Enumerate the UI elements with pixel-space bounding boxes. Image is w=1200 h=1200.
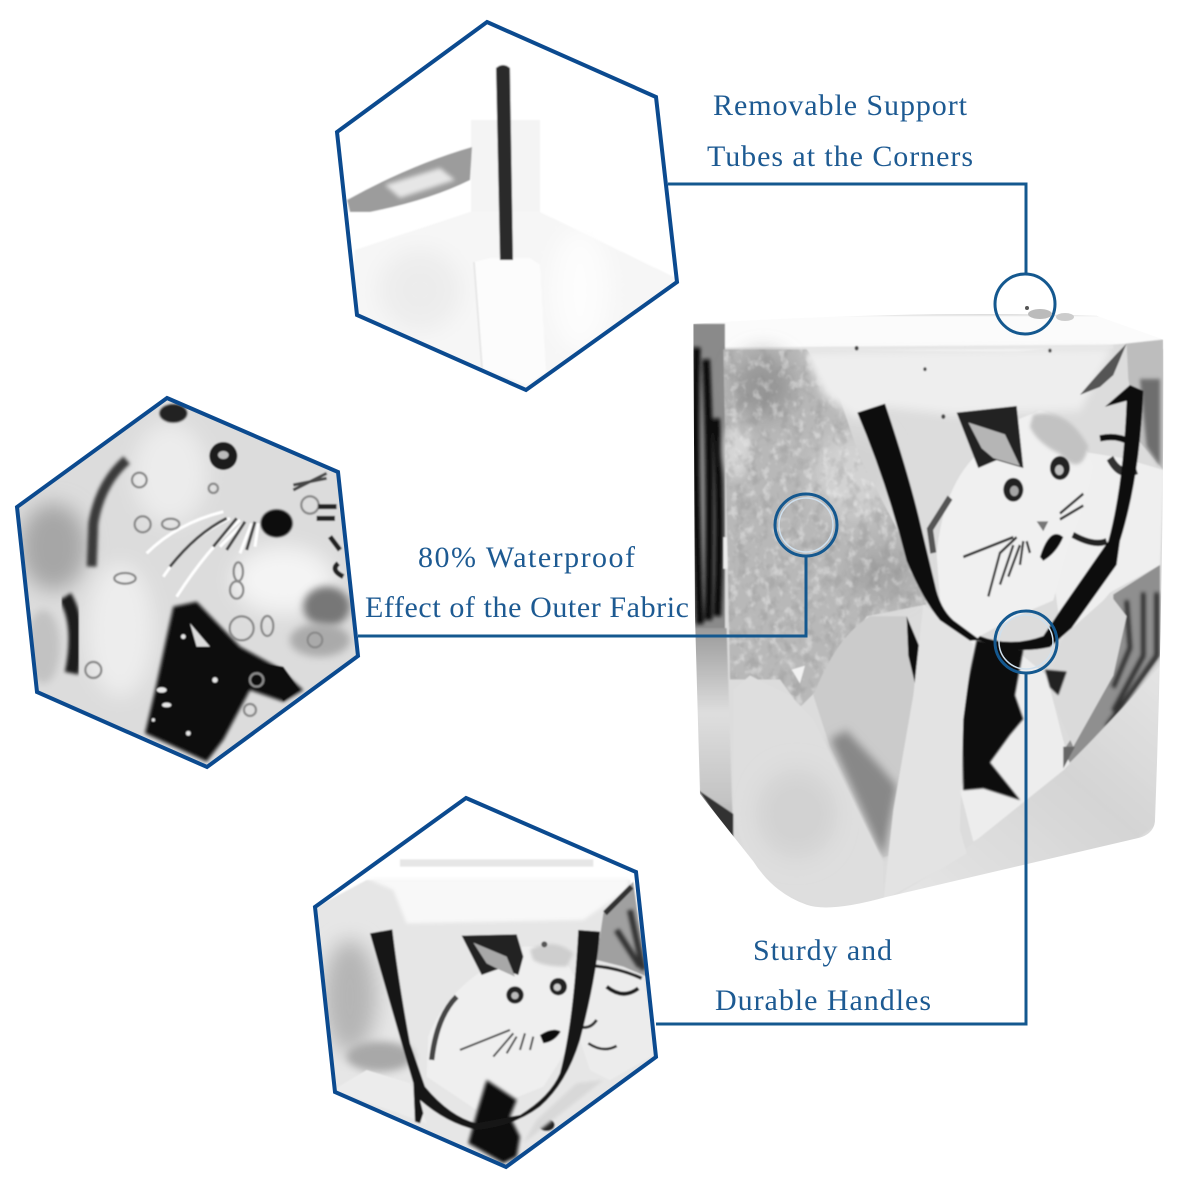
woman's shoulder [903, 690, 1140, 893]
product: laundry basket [693, 314, 1164, 908]
cat [427, 946, 580, 1110]
woman's face [577, 963, 657, 1080]
marble fabric wedge [347, 147, 472, 212]
whiskers [147, 512, 258, 597]
callout: durable handles: Sturdy and [753, 934, 892, 967]
handle straps [370, 929, 600, 1130]
hexagon border [337, 22, 677, 390]
cat [930, 406, 1093, 679]
black fur [468, 1080, 520, 1163]
marble background [723, 346, 1113, 707]
woman's hair, right side [1063, 340, 1163, 763]
handle straps [857, 385, 1143, 650]
hexagon: waterproof fabric detail [10, 390, 370, 775]
left side panel [692, 324, 733, 842]
hexagon border [17, 398, 358, 767]
right fur details [317, 507, 343, 577]
fur stripes [92, 460, 127, 567]
raised knee shadow [813, 616, 920, 857]
hexagon border [315, 798, 656, 1167]
highlights on black patch [152, 634, 218, 736]
callout: durable handles: Durable Handles [715, 984, 931, 1017]
callout: waterproof fabric: 80% Waterproof [418, 541, 635, 574]
white fabric [350, 212, 680, 395]
callout: durable handles [656, 611, 1057, 1024]
woman's face and cheek [1047, 437, 1163, 747]
eye droplet [209, 442, 237, 470]
forearm [888, 624, 972, 859]
top rim [690, 316, 1167, 351]
woman's hair [597, 882, 647, 977]
black fur patch [145, 602, 303, 762]
cat black fur [962, 640, 1023, 800]
translucent sleeve [471, 120, 540, 213]
water droplets [85, 473, 322, 716]
shin [746, 675, 880, 858]
support tube [496, 65, 513, 260]
corner pocket [474, 258, 546, 385]
hexagon: handles detail [310, 790, 665, 1175]
callout: waterproof fabric: Effect of the Outer Fabric [365, 591, 689, 624]
callout: removable support tubes: Tubes at the Corners [707, 140, 973, 173]
nose patch [261, 509, 293, 537]
callout: removable support tubes: Removable Support [713, 89, 968, 122]
hexagon: support tube detail [330, 15, 680, 395]
cat body [960, 648, 1070, 842]
callout: removable support tubes [668, 89, 1074, 334]
callout: waterproof fabric [358, 494, 837, 636]
